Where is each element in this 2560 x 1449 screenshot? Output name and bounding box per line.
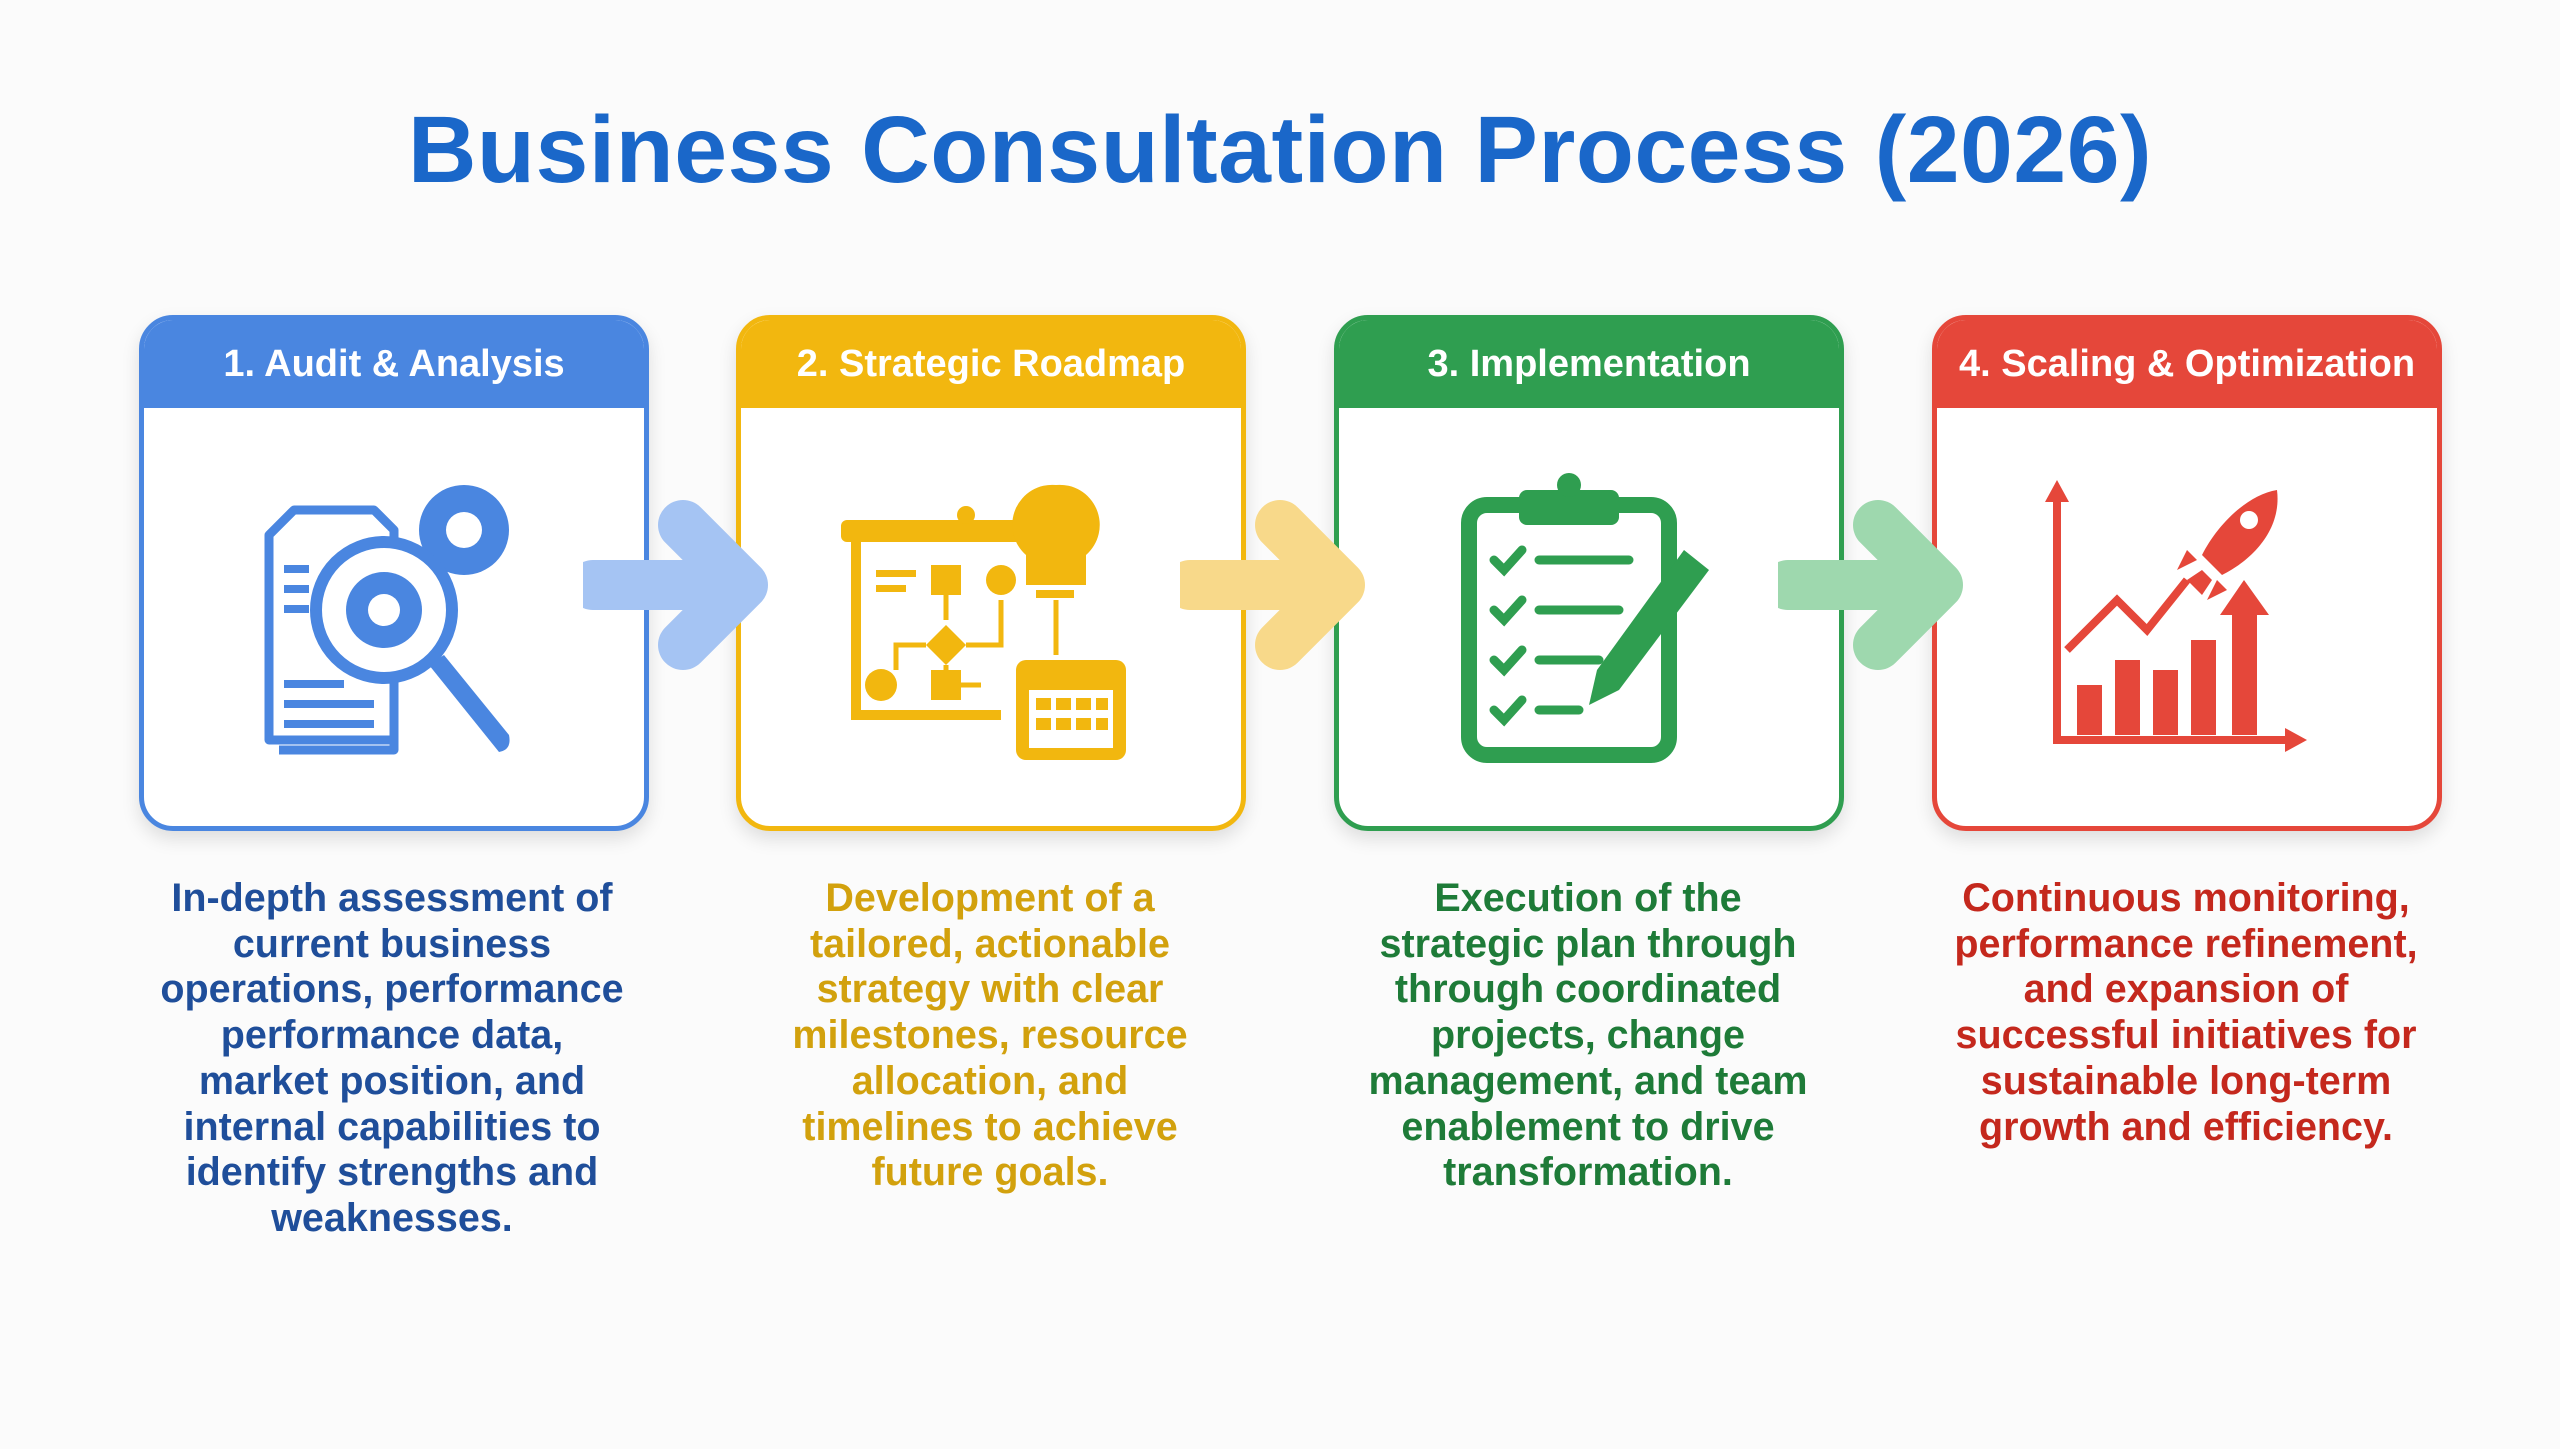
panel: scaling	[1932, 315, 2442, 831]
text: implementation: projects, change	[1431, 1013, 1745, 1057]
text: audit: operations, performance	[160, 967, 624, 1011]
panel: audit	[139, 315, 649, 831]
text: scaling: performance refinement,	[1954, 922, 2418, 966]
text: scaling: and expansion of	[2024, 967, 2348, 1011]
header: implementation: 3. Implementation	[1427, 343, 1751, 385]
text: roadmap: Development of a	[825, 876, 1155, 920]
text: audit	[160, 876, 624, 1240]
header: scaling	[1937, 320, 2437, 408]
text: implementation: through coordinated	[1395, 967, 1781, 1011]
text: roadmap: future goals.	[871, 1150, 1109, 1194]
text: audit: market position, and	[199, 1059, 585, 1103]
header: implementation	[1339, 320, 1839, 408]
icon: clipboard pencil	[1461, 473, 1709, 763]
text: audit: weaknesses.	[271, 1196, 513, 1240]
icon: whiteboard lightbulb calendar	[841, 484, 1126, 760]
icon: document magnifier gears	[264, 485, 510, 754]
header: audit: 1. Audit & Analysis	[223, 343, 565, 385]
text: implementation: Execution of the	[1434, 876, 1742, 920]
panel: roadmap	[736, 315, 1246, 831]
text: implementation	[1368, 876, 1808, 1194]
text: roadmap: tailored, actionable	[810, 922, 1170, 966]
text: scaling	[1954, 876, 2418, 1149]
text: roadmap	[792, 876, 1188, 1194]
text: roadmap: allocation, and	[852, 1059, 1128, 1103]
text: scaling: Continuous monitoring,	[1962, 876, 2410, 920]
text: scaling: successful initiatives for	[1955, 1013, 2416, 1057]
arrow 2	[1180, 500, 1365, 670]
text: scaling: growth and efficiency.	[1979, 1105, 2393, 1149]
text: audit: internal capabilities to	[183, 1105, 601, 1149]
text: audit: performance data,	[221, 1013, 563, 1057]
text: implementation: strategic plan through	[1380, 922, 1796, 966]
arrow 1	[583, 500, 768, 670]
text: implementation: enablement to drive	[1401, 1105, 1775, 1149]
text: roadmap: timelines to achieve	[802, 1105, 1178, 1149]
text: audit: current business	[233, 922, 551, 966]
title: Business Consultation Process (2026)	[408, 97, 2152, 203]
arrow 3	[1778, 500, 1963, 670]
text: audit: In-depth assessment of	[171, 876, 613, 920]
icon: chart rocket	[2045, 480, 2307, 752]
text: implementation: management, and team	[1368, 1059, 1808, 1103]
header: roadmap	[741, 320, 1241, 408]
header: scaling: 4. Scaling & Optimization	[1959, 343, 2415, 385]
header: roadmap: 2. Strategic Roadmap	[797, 343, 1185, 385]
text: audit: identify strengths and	[186, 1150, 598, 1194]
text: scaling: sustainable long-term	[1981, 1059, 2391, 1103]
text: roadmap: strategy with clear	[817, 967, 1163, 1011]
panel: implementation	[1334, 315, 1844, 831]
text: implementation: transformation.	[1443, 1150, 1733, 1194]
text: roadmap: milestones, resource	[792, 1013, 1188, 1057]
header: audit	[144, 320, 644, 408]
